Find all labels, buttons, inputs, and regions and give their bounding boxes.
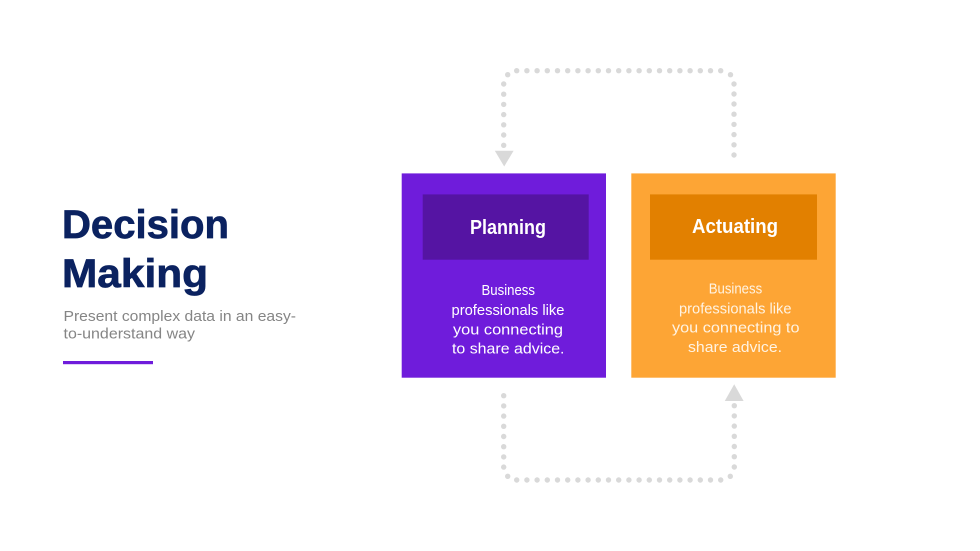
- Actuating description: share advice.: [688, 339, 782, 356]
- title underline accent: [63, 361, 153, 364]
- Actuating heading band: [650, 194, 817, 260]
- Actuating description: you connecting to: [672, 320, 800, 337]
- Actuating description: Business: [709, 281, 762, 298]
- subtitle text: to-understand way: [64, 326, 196, 342]
- Planning description: [452, 282, 564, 358]
- Planning description: Business: [482, 282, 535, 299]
- Planning description: you connecting: [453, 322, 563, 338]
- Actuating description: [672, 281, 800, 356]
- Planning description: to share advice.: [452, 341, 564, 358]
- panel: Actuating: [631, 173, 836, 378]
- subtitle text: [64, 308, 296, 342]
- title: [62, 203, 229, 296]
- top dotted connector with arrow: [495, 68, 737, 166]
- bottom dotted connector with arrow: [501, 384, 744, 483]
- Planning heading band: Planning: [470, 217, 546, 239]
- Actuating description: professionals like: [679, 300, 792, 317]
- subtitle text: Present complex data in an easy-: [64, 308, 296, 325]
- Planning heading band: [423, 194, 589, 260]
- Actuating heading band: Actuating: [692, 216, 778, 238]
- title: Making: [62, 252, 208, 296]
- title: Decision: [62, 203, 229, 247]
- panel: Planning: [402, 173, 606, 378]
- Planning description: professionals like: [452, 302, 564, 319]
